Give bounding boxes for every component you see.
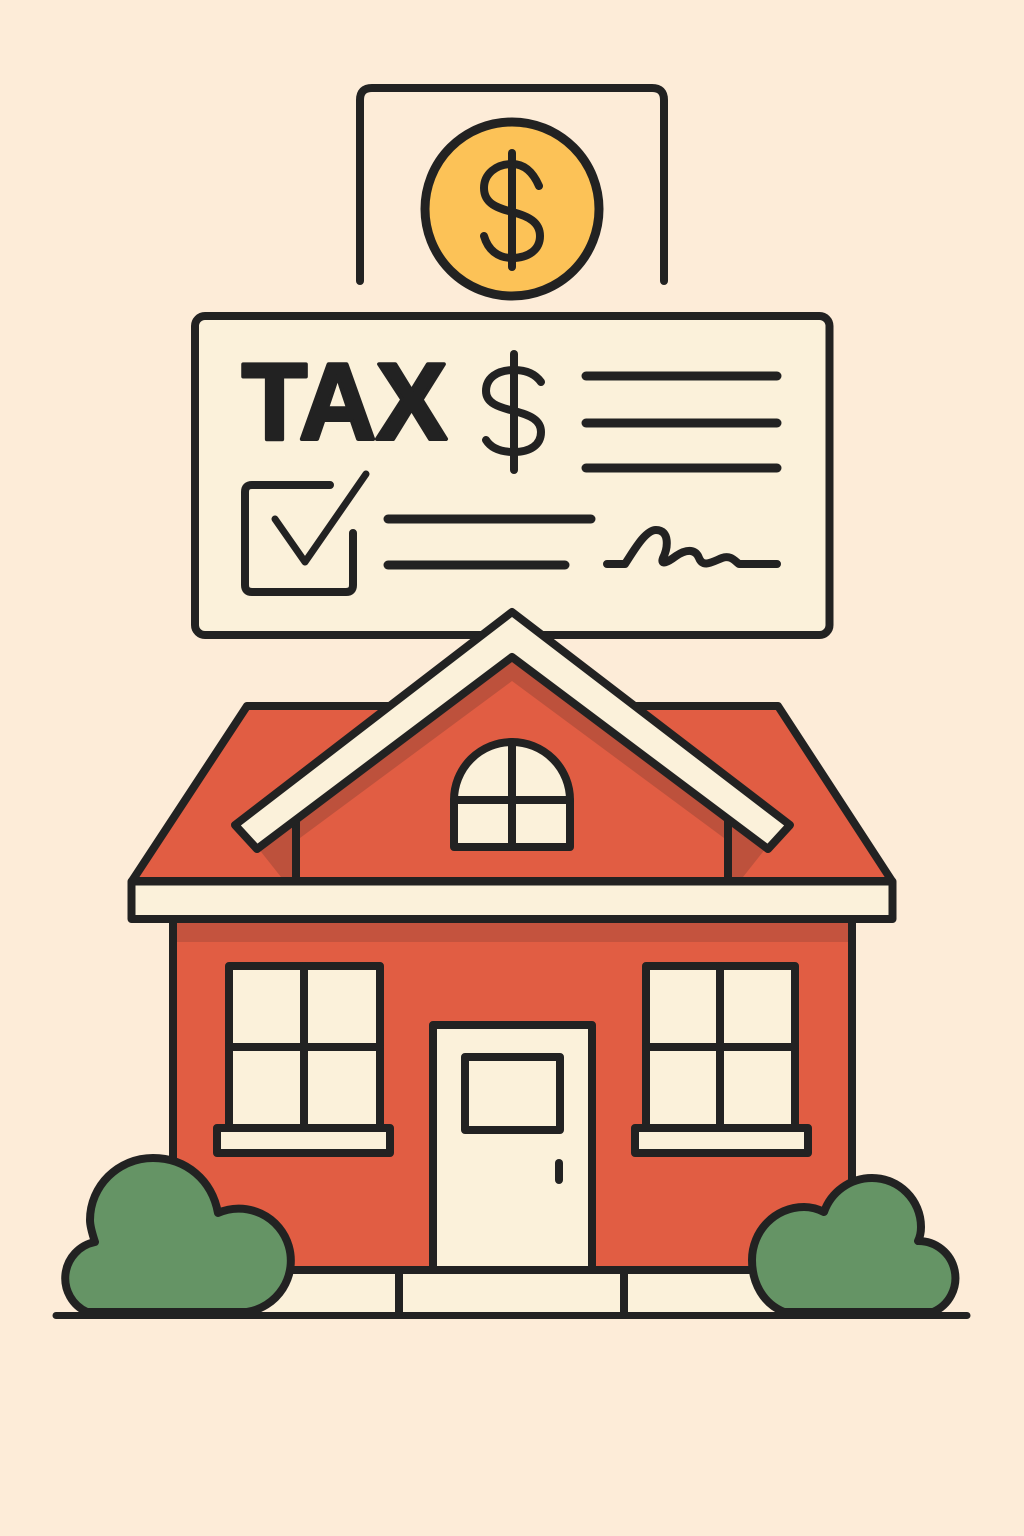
attic window: [454, 742, 570, 847]
front steps: [270, 1270, 770, 1315]
left window: [217, 966, 390, 1153]
eave band: [132, 882, 892, 919]
gable roof trim: [235, 612, 790, 849]
door: [433, 1025, 592, 1270]
bracket frame above coin: [360, 88, 664, 281]
wall shadow under eave: [177, 921, 848, 942]
icon: form dollar sign: [486, 354, 541, 470]
roof side shadows: [258, 820, 766, 877]
gable: [296, 655, 728, 881]
heading: TAX: TAX: [242, 341, 447, 463]
panel: tax form: [195, 316, 830, 635]
panel: house: [132, 612, 892, 1315]
form text lines: [388, 376, 777, 565]
right window: [635, 966, 808, 1153]
house wall: [173, 915, 852, 1270]
icon: checkbox: [245, 474, 366, 592]
gable roof shadow: [300, 658, 724, 838]
icon: dollar coin: [425, 122, 599, 296]
ground line: [56, 1312, 967, 1319]
icon: left bush: [65, 1158, 291, 1312]
main roof: [132, 706, 892, 881]
signature: [607, 530, 777, 564]
icon: right bush: [752, 1178, 955, 1312]
